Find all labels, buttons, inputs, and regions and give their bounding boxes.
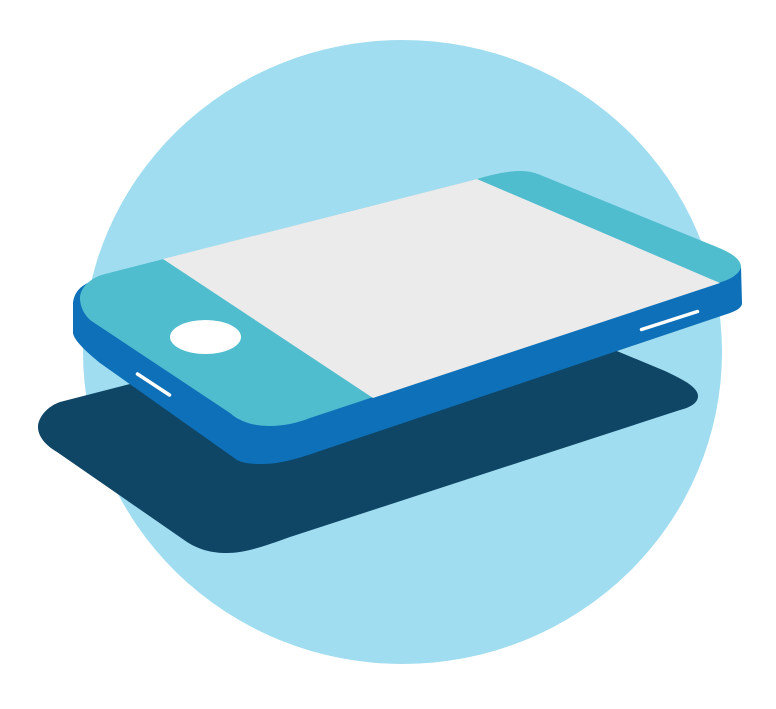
background circle <box>83 40 722 664</box>
phone <box>73 171 742 464</box>
phone face <box>80 171 741 426</box>
home button <box>170 320 241 354</box>
phone shadow <box>38 344 698 553</box>
phone body side <box>73 266 742 464</box>
phone screen <box>163 179 720 398</box>
side button right <box>642 312 698 330</box>
side button left <box>138 374 170 395</box>
